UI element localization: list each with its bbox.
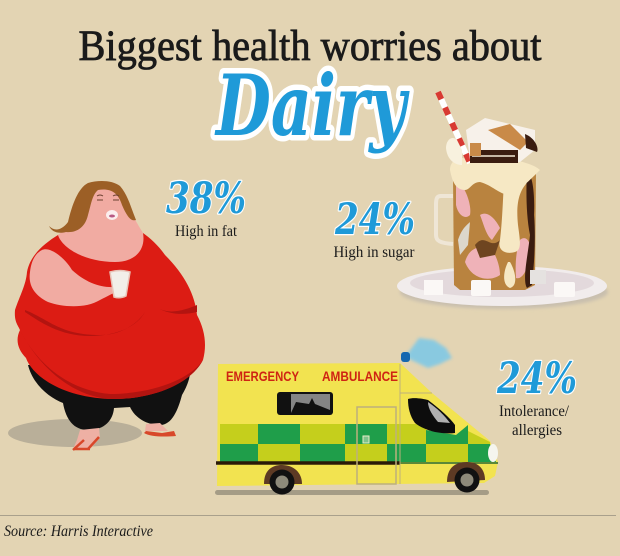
illustration: ambulance: EMERGENCY <box>226 368 300 384</box>
stat: 24% intolerance/allergies: Intolerance/ <box>499 403 570 420</box>
stat: 24% high in sugar: 24% <box>334 195 415 245</box>
stat: 38% high in fat: 38% <box>166 174 246 224</box>
illustration: woman holding a glass of milk <box>8 181 205 450</box>
illustration: milkshake on a plate <box>397 92 608 309</box>
stat: 38% high in fat <box>166 174 246 240</box>
stat: 24% high in sugar <box>334 195 415 261</box>
stat: 24% intolerance/allergies: 24% <box>496 354 577 404</box>
title: Biggest health worries about <box>78 23 542 70</box>
illustration: ambulance <box>215 338 498 495</box>
stat: 24% intolerance/allergies <box>496 354 577 439</box>
stat: 24% intolerance/allergies: allergies <box>512 422 562 439</box>
illustration: ambulance: AMBULANCE <box>322 368 398 384</box>
source note: Source: Harris Interactive <box>4 523 153 540</box>
heading: Dairy: Dairy <box>214 56 410 155</box>
divider line <box>0 515 616 516</box>
stat: 38% high in fat: High in fat <box>175 223 237 240</box>
stat: 24% high in sugar: High in sugar <box>334 244 415 261</box>
